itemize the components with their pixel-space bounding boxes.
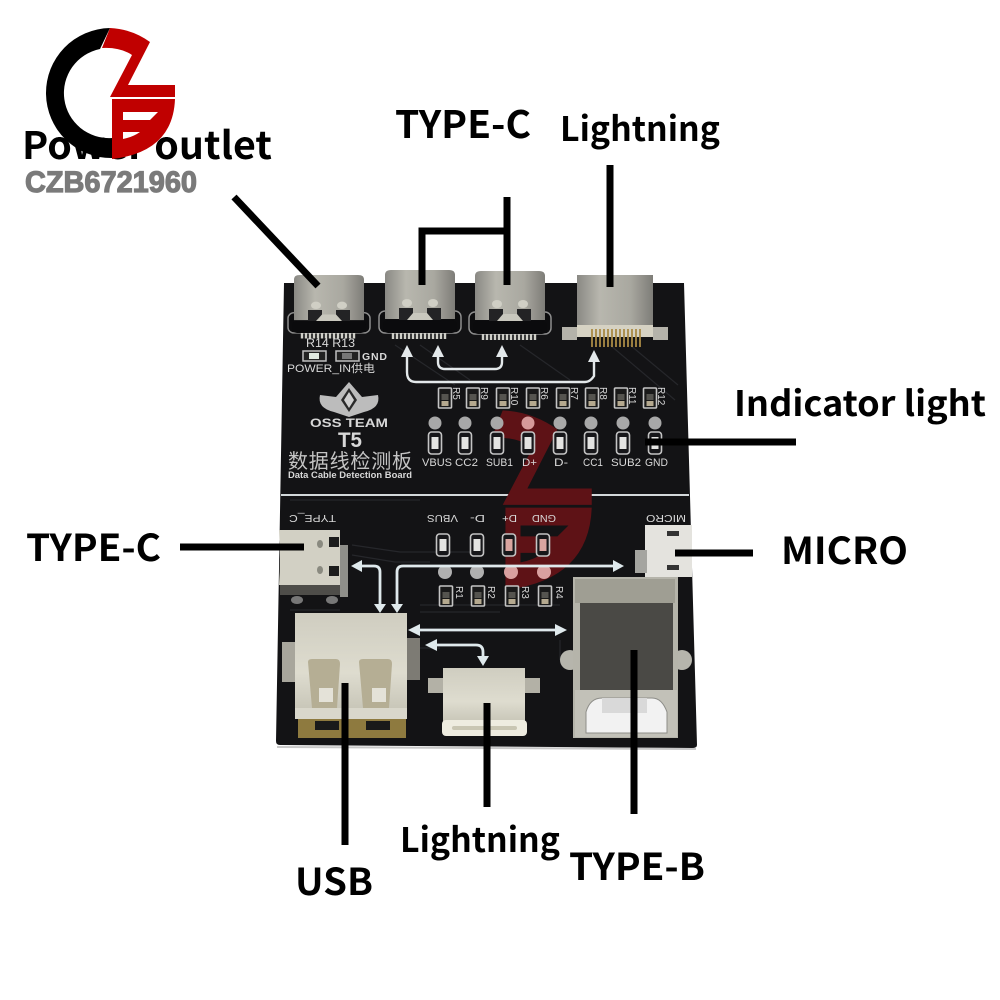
bottom silk labels: MICRO <box>646 512 686 524</box>
indicator pads and LEDs top: VBUS <box>422 457 452 469</box>
label: indicator light: Indicator light <box>734 376 986 427</box>
leader: power outlet <box>234 197 318 286</box>
board logo and title: OSS TEAM <box>310 416 388 430</box>
circuit board <box>276 270 697 749</box>
LEDs and resistors bottom: R4 <box>553 586 564 599</box>
board logo and title: 数据线检测板 <box>288 445 412 474</box>
resistors top row: R6 <box>538 387 549 400</box>
signal arrows bottom <box>351 560 624 666</box>
label: top lightning: Lightning <box>560 102 720 151</box>
resistors top row: R9 <box>478 387 489 400</box>
resistors top row: R8 <box>597 387 608 400</box>
bottom silk labels: D- <box>469 512 485 524</box>
bottom silk labels <box>289 512 686 524</box>
indicator pads and LEDs top: CC1 <box>583 457 603 469</box>
power labels: GND <box>362 351 387 363</box>
LEDs and resistors bottom <box>436 534 564 606</box>
power labels <box>287 336 387 375</box>
indicator pads and LEDs top: D+ <box>522 457 537 469</box>
board logo and title: T5 <box>338 429 362 452</box>
leader: top lightning <box>606 165 614 287</box>
LEDs and resistors bottom: R1 <box>453 586 464 599</box>
resistors top row: R7 <box>568 387 579 400</box>
leader: bottom lightning <box>484 703 490 807</box>
connector: type-c 2 <box>379 270 461 339</box>
leader: type-b <box>630 650 638 814</box>
resistors top row: R5 <box>450 387 461 400</box>
connector: micro usb <box>635 525 692 577</box>
connector: top lightning <box>562 275 668 347</box>
label: micro: MICRO <box>781 521 908 575</box>
bottom silk labels: TYPE_C <box>289 512 336 524</box>
watermark code: CZB6721960 <box>25 166 197 199</box>
connector: type-b <box>560 577 692 738</box>
indicator pads and LEDs top: GND <box>645 457 668 469</box>
connector: usb <box>282 613 420 738</box>
watermark on board <box>492 410 592 590</box>
leader: type-c bracket <box>422 197 507 285</box>
indicator pads and LEDs top: D- <box>554 457 568 469</box>
resistors top row: R10 <box>508 387 519 406</box>
heading: power outlet: Power outlet <box>22 115 272 170</box>
connector: power type-c <box>288 275 370 338</box>
label: bottom lightning: Lightning <box>400 813 560 862</box>
leader: left type-c <box>180 544 304 550</box>
power labels: POWER_IN供电 <box>287 361 375 375</box>
connector: type-c 3 <box>469 271 551 340</box>
logo: CZB brand mark <box>46 28 175 159</box>
bottom silk labels: D+ <box>502 512 517 524</box>
label: usb: USB <box>295 852 373 906</box>
LEDs and resistors bottom: R3 <box>519 586 530 599</box>
resistors top row: R12 <box>655 387 666 406</box>
board logo and title <box>288 382 412 480</box>
resistors top row <box>438 387 666 408</box>
leader: usb <box>342 683 348 845</box>
indicator pads and LEDs top: SUB1 <box>486 457 513 469</box>
connector: bottom lightning <box>428 668 540 736</box>
leader: indicator light <box>645 438 796 446</box>
connector: left type-c <box>279 530 348 604</box>
bottom silk labels: GND <box>532 512 556 524</box>
LEDs and resistors bottom: R2 <box>485 586 496 599</box>
leader: micro <box>675 550 753 556</box>
board logo and title: Data Cable Detection Board <box>288 470 412 480</box>
power labels: R14 R13 <box>306 336 355 350</box>
label: top type-c: TYPE-C <box>395 94 531 149</box>
resistors top row: R11 <box>626 387 637 405</box>
signal arrows top <box>401 345 600 382</box>
indicator pads and LEDs top: CC2 <box>455 457 478 469</box>
bottom silk labels: VBUS <box>427 512 458 524</box>
label: type-b: TYPE-B <box>569 837 705 891</box>
indicator pads and LEDs top: SUB2 <box>611 457 641 469</box>
label: left type-c: TYPE-C <box>26 518 161 572</box>
indicator pads and LEDs top <box>422 416 668 469</box>
